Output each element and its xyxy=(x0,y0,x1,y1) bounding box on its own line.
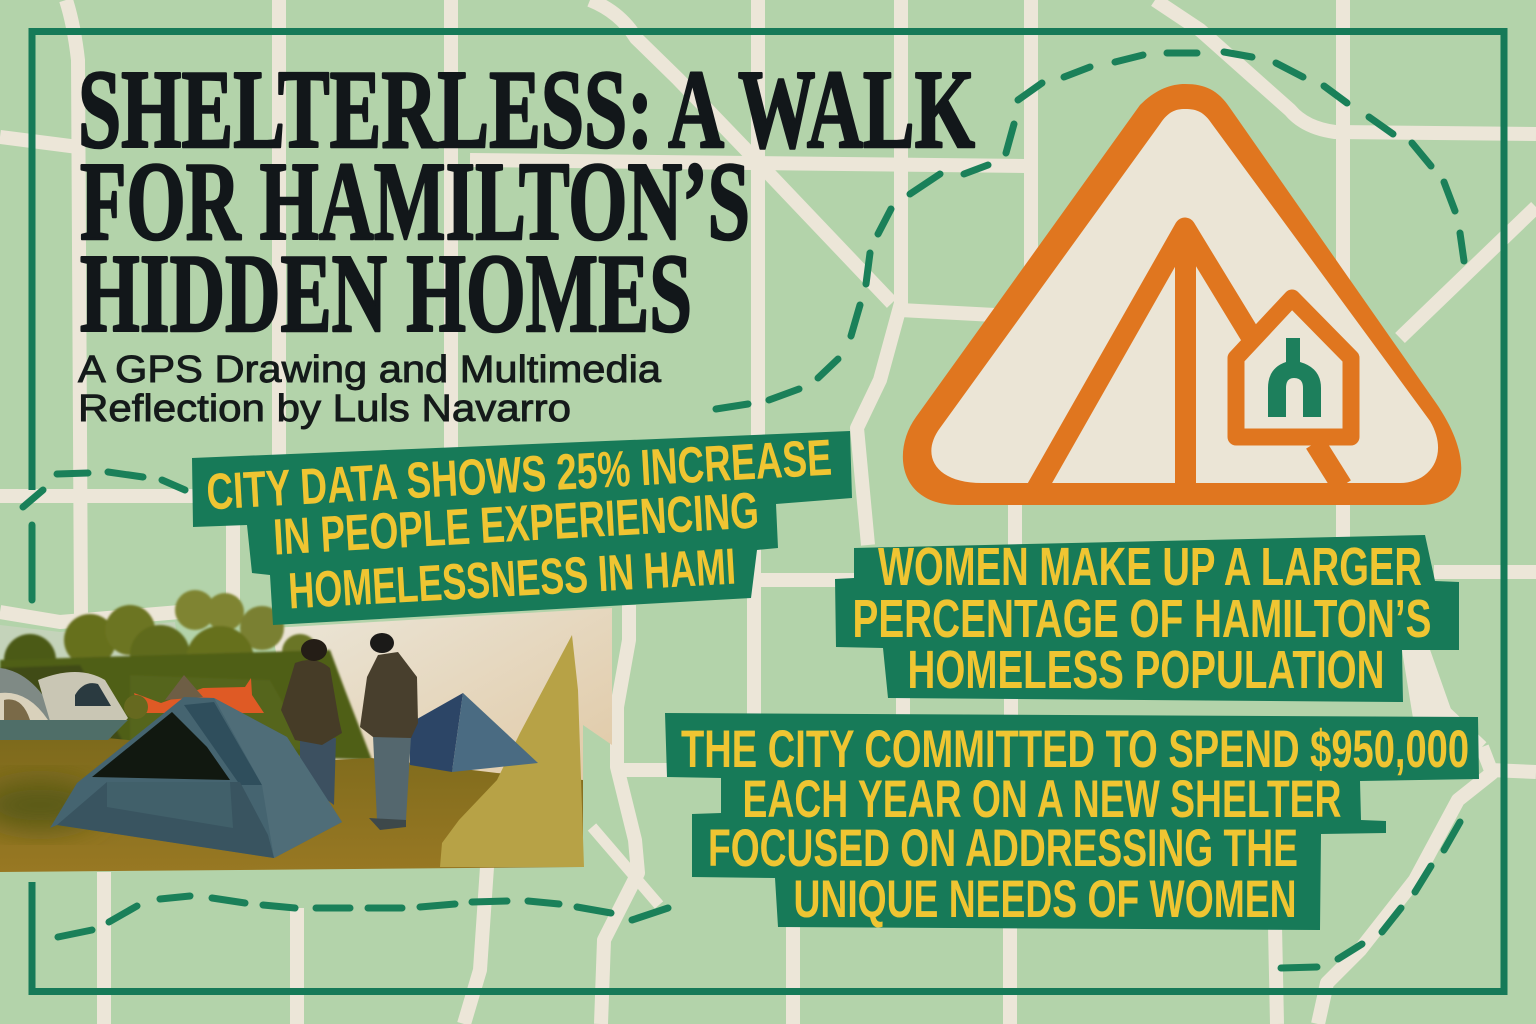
callout 3 text: FOCUSED ON ADDRESSING THE xyxy=(708,819,1298,878)
house outline xyxy=(1236,298,1351,437)
orange tarp xyxy=(134,678,264,713)
callout 3 background xyxy=(665,713,1479,930)
trees xyxy=(0,590,372,760)
subtitle: A GPS Drawing and Multimedia xyxy=(78,349,662,391)
sand wedge xyxy=(440,635,584,867)
callout 1 background xyxy=(192,431,852,625)
callout 1 text xyxy=(205,429,833,619)
callout: city data xyxy=(192,429,852,625)
callout 3 text xyxy=(681,720,1469,929)
sky xyxy=(272,608,612,800)
title: HIDDEN HOMES xyxy=(80,232,692,356)
callout 3 text: UNIQUE NEEDS OF WOMEN xyxy=(794,870,1296,929)
callout 1 text: HOMELESSNESS IN HAMI xyxy=(287,538,737,619)
olive shrub xyxy=(124,695,148,719)
house tail xyxy=(1315,443,1342,486)
ground shadow xyxy=(0,780,100,830)
callout: shelter funding xyxy=(665,713,1479,930)
ground xyxy=(0,738,583,872)
callout: women xyxy=(835,535,1459,702)
back left tents xyxy=(0,668,128,740)
callout 2 background xyxy=(835,535,1459,702)
mountain lines xyxy=(1036,228,1252,490)
pale haze top left xyxy=(0,622,180,660)
large blue tent xyxy=(50,697,342,858)
title: SHELTERLESS: A WALK xyxy=(78,48,975,172)
subtitle: Reflection by Luls Navarro xyxy=(78,388,571,430)
small brown tent xyxy=(165,675,203,700)
callout 1 text: IN PEOPLE EXPERIENCING xyxy=(272,482,760,566)
triangle outer shape xyxy=(903,84,1461,505)
person right xyxy=(360,633,418,830)
callout 1 text: CITY DATA SHOWS 25% INCREASE xyxy=(205,429,833,520)
keyhole symbol xyxy=(1268,338,1321,417)
icon: warning triangle with mountain and house xyxy=(903,84,1461,505)
right blue tent xyxy=(410,693,538,772)
title xyxy=(78,48,975,356)
person left xyxy=(281,639,342,805)
callout 2 text xyxy=(852,537,1432,700)
subtitle xyxy=(78,349,662,430)
triangle inner panel xyxy=(931,109,1438,483)
title: FOR HAMILTON’S xyxy=(80,140,750,264)
photo: tents and two people xyxy=(0,590,612,872)
